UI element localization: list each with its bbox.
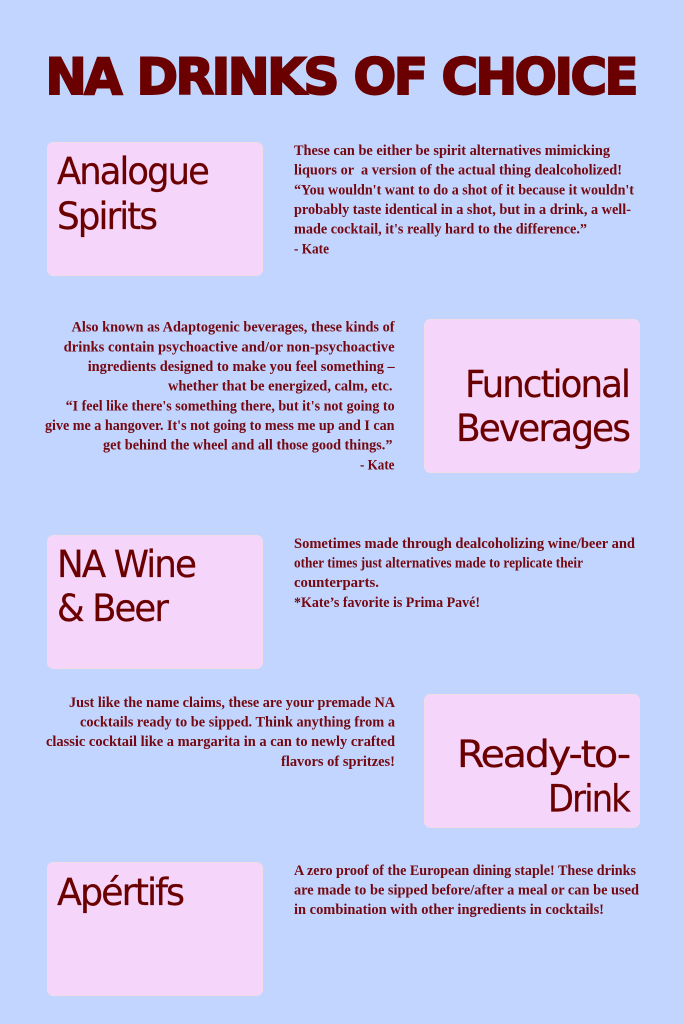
text block: analogue spirits description: These can be either be spirit alternatives mimicking — [294, 143, 610, 159]
text block: functional beverages description: whether that be energized, calm, etc. — [168, 379, 393, 395]
heading: ready-to-drink — [457, 733, 631, 820]
text block: analogue spirits description: “You wouldn't want to do a shot of it because it wouldn't — [294, 182, 634, 198]
heading: NA wine and beer: NA Wine — [57, 543, 195, 586]
panel: aperitifs — [48, 862, 640, 996]
panel: NA wine and beer — [48, 536, 636, 668]
title: OF — [354, 48, 426, 106]
heading: NA wine and beer: & Beer — [57, 587, 170, 630]
text block: aperitifs description: A zero proof of the European dining staple! These drinks — [294, 863, 636, 879]
text block: analogue spirits description — [294, 143, 634, 257]
title: DRINKS — [136, 48, 337, 106]
text block: NA wine and beer description: other times just alternatives made to replicate their — [294, 556, 583, 572]
text block: functional beverages description: - Kate — [360, 457, 395, 473]
text block: functional beverages description: get behind the wheel and all those good things.” — [103, 438, 392, 454]
card: ready-to-drink — [424, 694, 640, 828]
title: NA — [46, 48, 123, 106]
text block: ready-to-drink description: Just like the name claims, these are your premade NA — [69, 695, 395, 711]
text block: functional beverages description: “I feel like there's something there, but it's not going to — [66, 398, 395, 414]
panel: functional beverages — [45, 320, 640, 473]
text block: aperitifs description: in combination with other ingredients in cocktails! — [294, 902, 604, 918]
text block: ready-to-drink description: cocktails ready to be sipped. Think anything from a — [80, 715, 395, 731]
text block: analogue spirits description: made cocktail, it's really hard to the difference.” — [294, 222, 587, 238]
heading: functional beverages: Beverages — [456, 407, 630, 450]
title — [46, 48, 636, 106]
text block: analogue spirits description: - Kate — [294, 241, 329, 257]
text block: ready-to-drink description — [46, 695, 396, 770]
text block: functional beverages description: ingredients designed to make you feel something – — [88, 359, 395, 375]
card: functional beverages — [424, 320, 640, 472]
text block: analogue spirits description: probably taste identical in a shot, but in a drink, a well- — [294, 202, 631, 218]
heading: functional beverages: Functional — [465, 363, 629, 406]
heading: analogue spirits — [57, 150, 208, 238]
text block: functional beverages description: give me a hangover. It's not going to mess me up and I can — [45, 418, 395, 434]
text block: aperitifs description: are made to be sipped before/after a meal or can be used — [294, 883, 640, 899]
text block: aperitifs description — [294, 863, 640, 918]
text block: ready-to-drink description: flavors of spritzes! — [281, 754, 395, 770]
heading: ready-to-drink: Ready-to- — [457, 733, 630, 776]
heading: ready-to-drink: Drink — [548, 778, 631, 820]
text block: analogue spirits description: liquors or a version of the actual thing dealcoholized! — [294, 163, 622, 179]
text block: functional beverages description: drinks contain psychoactive and/or non-psychoactive — [64, 339, 395, 355]
title: CHOICE — [442, 48, 636, 106]
text block: functional beverages description — [45, 320, 395, 473]
card: NA wine and beer — [48, 536, 262, 668]
heading: aperitifs: Apértifs — [57, 871, 184, 914]
text block: functional beverages description: Also known as Adaptogenic beverages, these kinds of — [72, 320, 395, 336]
text block: ready-to-drink description: classic cocktail like a margarita in a can to newly crafted — [46, 734, 396, 750]
panel: ready-to-drink — [46, 694, 640, 828]
text block: NA wine and beer description: *Kate’s favorite is Prima Pavé! — [294, 595, 480, 611]
text block: NA wine and beer description: counterparts. — [294, 575, 379, 591]
heading: analogue spirits: Analogue — [57, 150, 208, 193]
card: analogue spirits — [48, 142, 262, 276]
card: aperitifs — [48, 862, 262, 996]
text block: NA wine and beer description — [294, 536, 636, 611]
panel: analogue spirits — [48, 142, 634, 276]
text block: NA wine and beer description: Sometimes made through dealcoholizing wine/beer and — [294, 536, 636, 552]
heading: functional beverages — [456, 363, 630, 450]
heading: NA wine and beer — [57, 543, 195, 630]
heading: analogue spirits: Spirits — [57, 195, 157, 238]
